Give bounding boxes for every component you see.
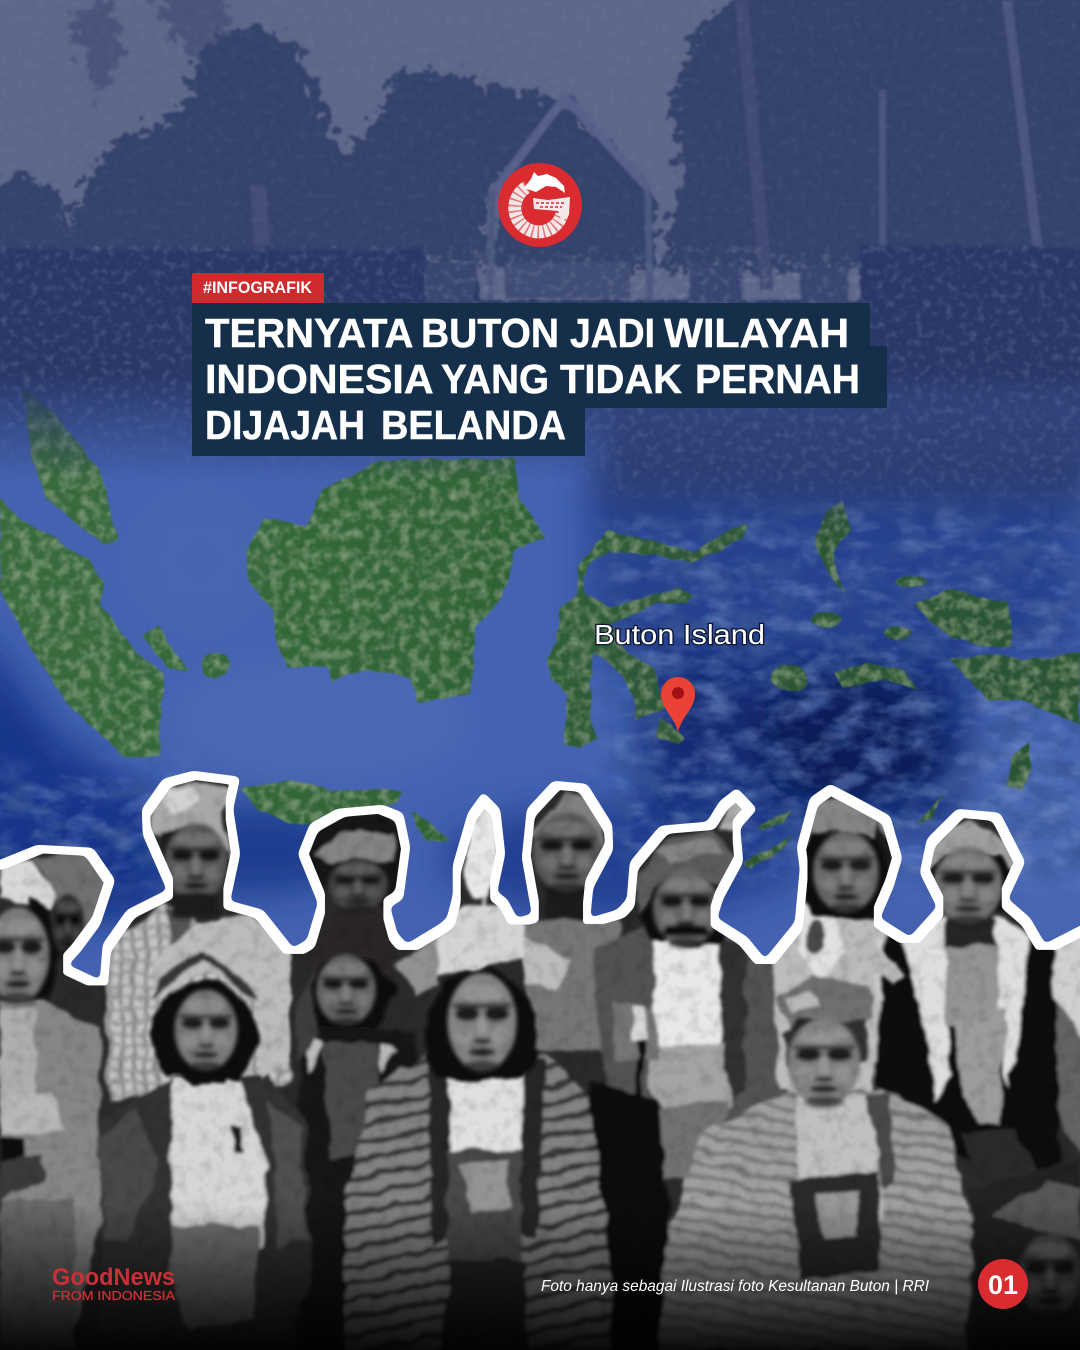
title block [192,303,887,456]
icon: map location pin [661,677,695,732]
garments [0,885,1080,1350]
sea-floor texture [0,498,1080,894]
photo grain [1,782,1080,1280]
page number badge: 01 [988,1270,1018,1300]
dark hair [30,835,1018,1090]
map label: Buton Island: Buton Island [594,619,765,650]
brand: GoodNews from Indonesia: GoodNews [52,1264,175,1291]
palace walls [0,244,1080,514]
title block: PERNAH [695,356,860,402]
satellite map of Indonesia [0,382,1080,978]
background: old photograph of Buton palace and trees [0,0,1080,518]
head wraps and ornaments [0,780,1018,1080]
photo caption: Foto hanya sebagai Ilustrasi foto Kesultanan Buton | RRI [541,1278,930,1295]
islands [0,385,1080,868]
title block: YANG [441,356,549,402]
brand: GoodNews from Indonesia: FROM INDONESIA [52,1289,176,1303]
white cut-out outline of the group [0,771,1080,1350]
faces [0,812,1080,1319]
bottom dark gradient [0,1205,1080,1350]
page number badge [978,1259,1028,1309]
crossbar pattern [536,203,566,207]
title block: JADI [570,310,655,356]
title block: TIDAK [560,356,682,402]
title block: TERNYATA [205,310,413,356]
title block: BELANDA [381,402,566,448]
title block: DIJAJAH [205,402,365,448]
garuda head [524,172,565,193]
house roof, posts and trunks [250,0,1045,300]
logo: red circle with garuda G [498,163,582,247]
tree silhouettes [0,0,1080,270]
title block: BUTON [421,310,559,356]
brand: GoodNews from Indonesia [52,1264,176,1303]
ocean depth shading [0,470,1080,940]
title block: INDONESIA [205,356,433,402]
tag: #INFOGRAFIK: #INFOGRAFIK [203,278,313,297]
title block: WILAYAH [664,310,849,356]
logo ring [515,187,562,232]
G crossbar [533,197,570,222]
tag: #INFOGRAFIK [192,273,324,303]
ring tribal pattern [515,187,562,232]
cut-out photo of Buton Sultanate nobles [0,760,1080,1350]
